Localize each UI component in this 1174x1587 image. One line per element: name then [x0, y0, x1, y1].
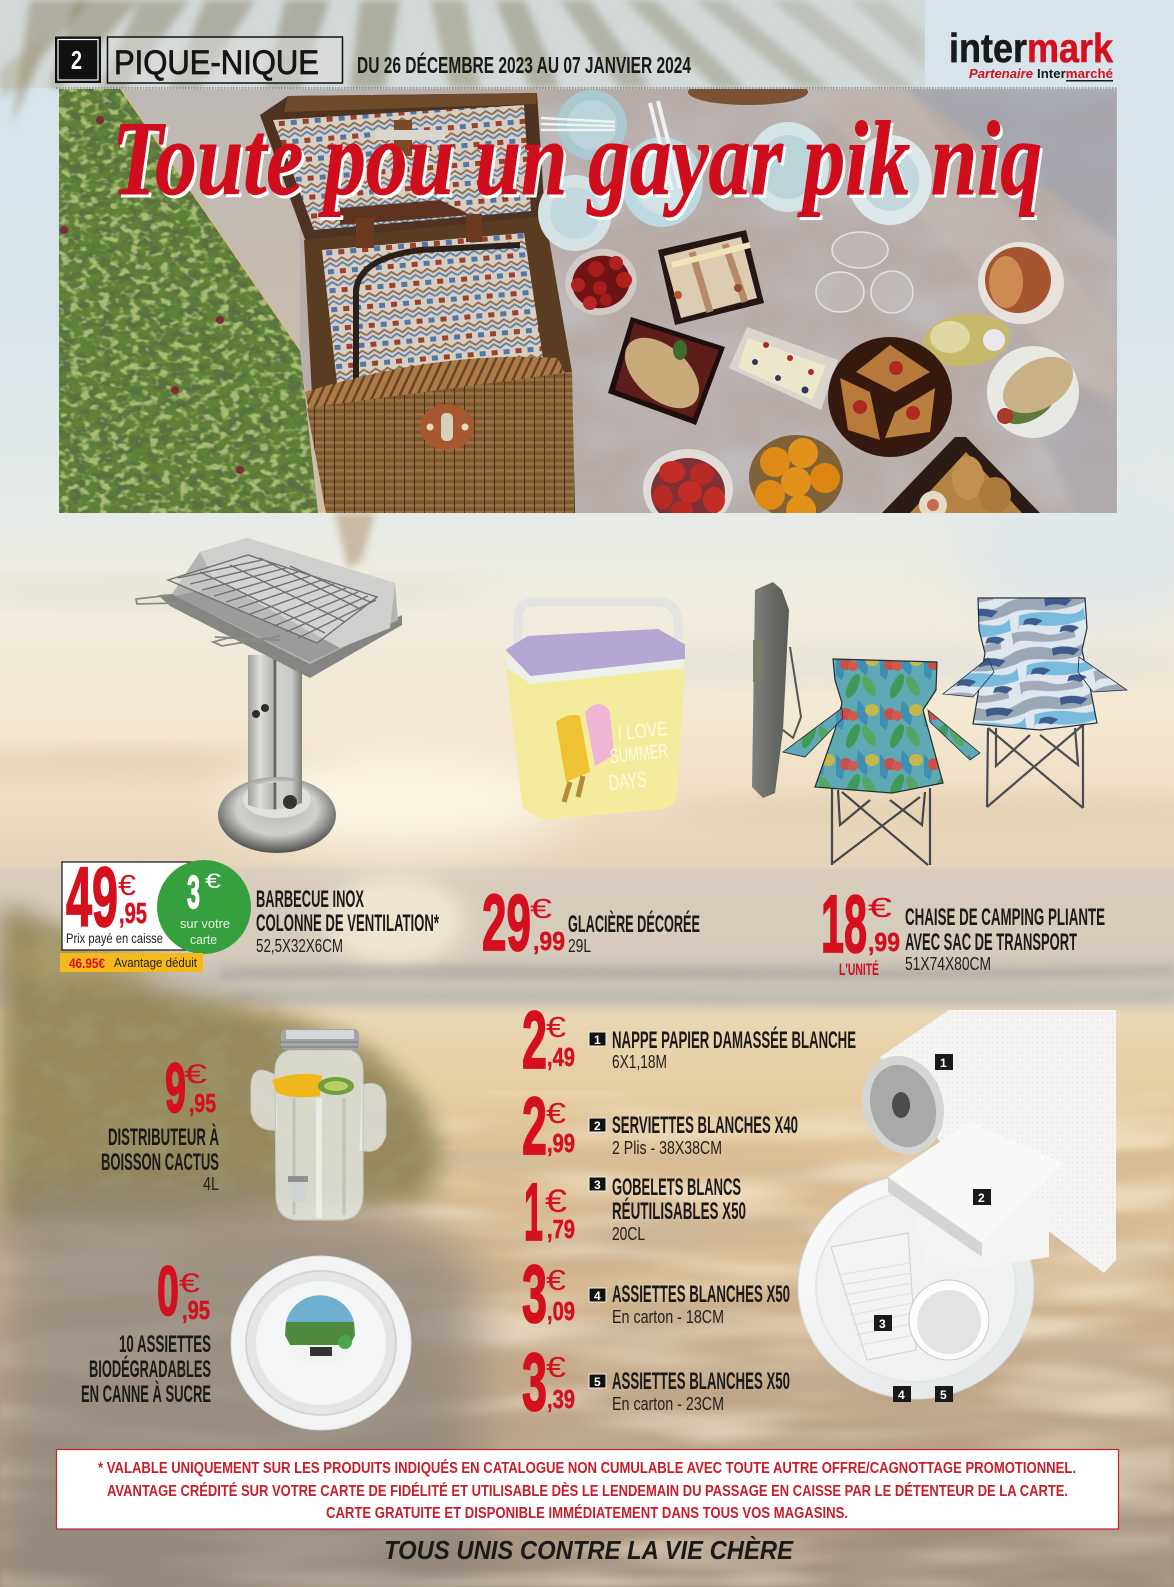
barbecue pan: [158, 594, 402, 678]
price: cooler: ,99: [533, 926, 565, 956]
tag 5: 5: [940, 1388, 947, 1402]
description: barbecue: COLONNE DE VENTILATION*: [256, 910, 439, 937]
pastries on dark plate: [828, 337, 952, 457]
price 2,99: 2: [522, 1081, 547, 1172]
description: cactus dispenser: BOISSON CACTUS: [101, 1149, 219, 1176]
cooler lettering: [603, 718, 674, 795]
description: plates: 10 ASSIETTES: [119, 1331, 211, 1358]
description: cooler: GLACIÈRE DÉCORÉE: [568, 910, 700, 938]
tableware item 2: napkins: 2: [594, 1119, 601, 1133]
loyalty card green badge: 3: [187, 866, 200, 918]
yellow advantage bar: 46.95€: [69, 955, 105, 971]
tag 4: [893, 1386, 911, 1402]
red tray with bread: [608, 317, 725, 425]
price: plate: ,95: [182, 1295, 210, 1325]
tag 3: [874, 1315, 892, 1331]
product: camping chairs: [752, 582, 1127, 865]
description: plates: EN CANNE À SUCRE: [81, 1380, 211, 1408]
tofu dessert box: [729, 327, 838, 410]
tag 1: [935, 1054, 953, 1070]
price 3,09: 3: [522, 1249, 547, 1340]
lower napkins: [912, 1200, 1049, 1268]
hero photo: picnic basket on blanket: [59, 79, 1117, 529]
tableware item 2: napkins: SERVIETTES BLANCHES X40: [612, 1112, 798, 1139]
tableware item 2: napkins: [589, 1112, 798, 1158]
blue camouflage chair: [943, 598, 1127, 808]
tableware item 1: tablecloth: [589, 1026, 856, 1072]
brown basket at top edge: [688, 89, 808, 105]
price: plate: 0: [157, 1252, 179, 1330]
description: barbecue: [256, 886, 439, 956]
barbecue grate: [168, 555, 377, 643]
price list: tableware: [522, 995, 575, 1428]
tableware item 5: plates 23cm: 5: [594, 1375, 601, 1389]
tag 4: 4: [898, 1388, 905, 1402]
tableware item 1: tablecloth: NAPPE PAPIER DAMASSÉE BLANCHE: [612, 1026, 856, 1054]
plastic cup: [831, 1233, 916, 1360]
price: chairs: L'UNITÉ: [839, 960, 879, 979]
blue plates and cutlery: [538, 90, 932, 251]
slogan: TOUS UNIS CONTRE LA VIE CHÈRE: [384, 1535, 794, 1565]
tableware item 3: cups: [589, 1174, 746, 1244]
description: cooler: [568, 910, 700, 956]
tableware item 3: cups: GOBELETS BLANCS: [612, 1174, 741, 1201]
price 1,79: ,79: [547, 1214, 575, 1244]
price card: barbecue: Prix payé en caisse: [66, 931, 163, 946]
product: barbecue: [136, 538, 402, 853]
loyalty card green badge: carte: [190, 932, 217, 947]
description: chairs: [905, 904, 1105, 974]
price card: barbecue: ,95: [119, 898, 147, 930]
tableware item 4: plates 18cm: ASSIETTES BLANCHES X50: [612, 1281, 790, 1308]
tableware item 4: plates 18cm: 4: [594, 1289, 601, 1303]
yellow advantage bar: [60, 953, 203, 972]
cooler lettering: SUMMER: [609, 740, 669, 768]
logo: intermark: Intermarché: [1037, 66, 1113, 81]
description: cactus dispenser: [101, 1123, 219, 1194]
tag 2: 2: [978, 1191, 985, 1205]
sandwich plate: [987, 345, 1083, 438]
loyalty card green badge: €: [205, 870, 221, 893]
cloth strip: [120, 89, 330, 513]
loyalty card green badge: [157, 860, 251, 954]
loyalty card green badge: sur votre: [180, 916, 230, 931]
price 2,49: 2: [522, 995, 547, 1086]
description: cactus dispenser: 4L: [203, 1174, 219, 1194]
footer legal notice: [56, 1450, 1118, 1529]
tableware item 1: tablecloth: 6X1,18M: [612, 1052, 667, 1072]
apple bowl: [978, 242, 1064, 324]
product: biodegradable plate: [231, 1256, 411, 1430]
price card: barbecue: 49: [66, 850, 118, 944]
sushi tray: [882, 437, 1040, 519]
page number box: 2: [71, 45, 82, 75]
sandwich box: [658, 230, 764, 325]
napkin stack: [888, 1122, 1063, 1257]
description: cooler: 29L: [568, 936, 591, 956]
price 2,49: ,49: [547, 1042, 575, 1072]
wine glasses: [816, 232, 913, 313]
description: barbecue: BARBECUE INOX: [256, 886, 364, 913]
price 2,99: ,99: [547, 1128, 575, 1158]
price 3,39: ,39: [547, 1384, 575, 1414]
price: plate: €: [179, 1268, 200, 1298]
small bowl: [909, 1280, 989, 1360]
description: plates: [81, 1331, 211, 1408]
price 2,49: €: [546, 1012, 566, 1044]
tableware item 3: cups: 20CL: [612, 1224, 645, 1244]
price 1,79: €: [545, 1183, 567, 1219]
logo: intermark: Partenaire: [969, 66, 1033, 81]
price card: barbecue: [60, 850, 251, 972]
price: cactus dispenser: ,95: [189, 1088, 216, 1118]
tag 3: 3: [879, 1317, 886, 1331]
tag 2: [973, 1189, 991, 1205]
description: barbecue: 52,5X32X6CM: [256, 936, 343, 956]
tableware item 2: napkins: 2 Plis - 38X38CM: [612, 1138, 722, 1158]
product: cooler: [507, 602, 684, 818]
price 3,09: €: [546, 1265, 566, 1297]
footer legal notice: CARTE GRATUITE ET DISPONIBLE IMMÉDIATEMENT DANS TOUS VOS MAGASINS.: [326, 1503, 848, 1522]
tableware item 5: plates 23cm: [589, 1368, 790, 1414]
price: cooler: 29: [482, 878, 531, 967]
price: cactus dispenser: 9: [165, 1049, 186, 1127]
tag 1: 1: [940, 1056, 947, 1070]
price 1,79: 1: [524, 1167, 543, 1258]
product: paper roll, napkins, plate, cup and bowl: [798, 1010, 1116, 1399]
tableware item 1: tablecloth: 1: [594, 1033, 601, 1047]
oil bottle: [922, 314, 1010, 366]
logo: intermark: intermark: [949, 25, 1113, 71]
tropical print chair: [783, 659, 980, 865]
section heading: PIQUE-NIQUE: [114, 44, 319, 82]
tableware item 3: cups: RÉUTILISABLES X50: [612, 1197, 746, 1225]
description: cactus dispenser: DISTRIBUTEUR À: [108, 1123, 219, 1151]
price 3,39: 3: [522, 1337, 547, 1428]
tableware item 5: plates 23cm: ASSIETTES BLANCHES X50: [612, 1368, 790, 1395]
tableware item 4: plates 18cm: En carton - 18CM: [612, 1307, 724, 1327]
price 3,39: €: [546, 1352, 566, 1384]
cooler lettering: I LOVE: [617, 718, 669, 745]
tag 5: [935, 1386, 953, 1402]
page number box: [55, 36, 101, 83]
price: chairs: 18: [821, 879, 867, 970]
blanket: [300, 89, 1117, 513]
price card: barbecue: €: [118, 870, 136, 902]
header dotted rule: [56, 87, 1117, 89]
strawberries: [643, 449, 733, 513]
grass: [59, 89, 321, 513]
tableware item 5: plates 23cm: En carton - 23CM: [612, 1394, 724, 1414]
picnic basket: [260, 93, 575, 513]
price: chairs: ,99: [868, 927, 900, 957]
carrying bag: [752, 582, 801, 798]
oranges basket: [749, 435, 843, 513]
price: cactus dispenser: €: [184, 1059, 207, 1089]
tomatoes: [565, 248, 637, 316]
price 2,99: €: [546, 1098, 566, 1130]
description: chairs: 51X74X80CM: [905, 954, 991, 974]
description: plates: BIODÉGRADABLES: [89, 1355, 211, 1383]
price: chairs: €: [868, 892, 893, 923]
cooler lettering: DAYS: [607, 767, 648, 795]
price: cooler: €: [530, 893, 553, 924]
validity dates: DU 26 DÉCEMBRE 2023 AU 07 JANVIER 2024: [357, 51, 691, 78]
white plate: [798, 1175, 1034, 1399]
tableware item 4: plates 18cm: [589, 1281, 790, 1327]
tableware item 3: cups: 3: [594, 1178, 601, 1192]
paper roll: [850, 1010, 1116, 1273]
product: cactus drink dispenser: [251, 1029, 386, 1220]
yellow advantage bar: Avantage déduit: [114, 955, 197, 970]
price 3,09: ,09: [547, 1296, 575, 1326]
palm frond at top: [0, 0, 925, 568]
